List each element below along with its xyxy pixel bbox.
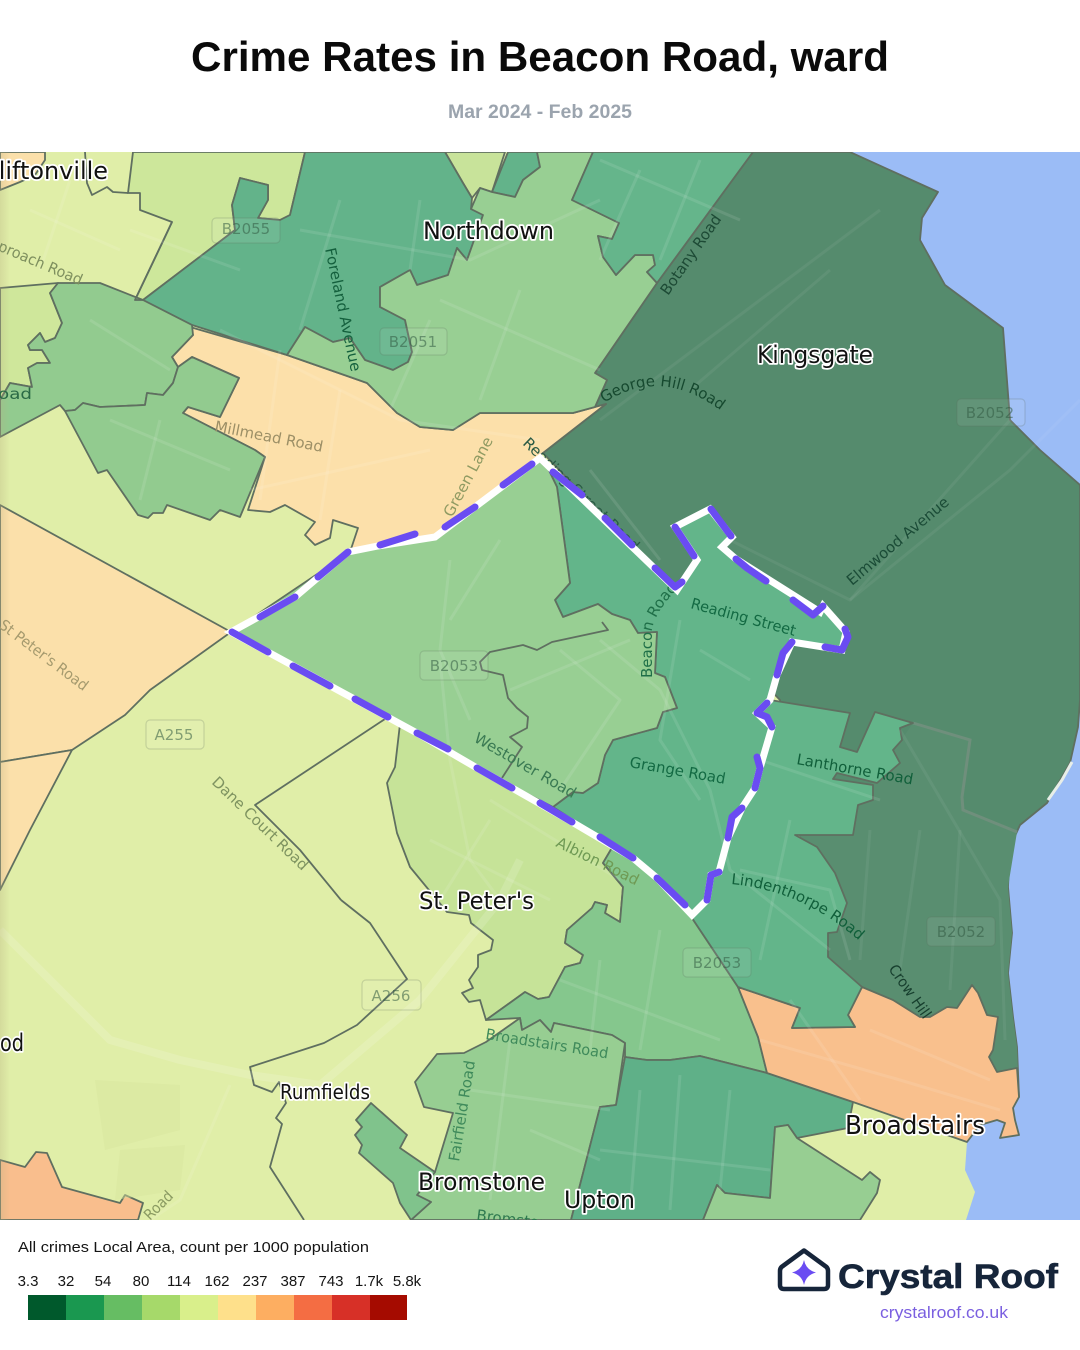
region: north yellow small (445, 152, 505, 198)
shield: B2055: B2055 (222, 220, 270, 238)
road path: Beacon Road baseline (652, 588, 678, 678)
road label: Albion Road: Albion Road (553, 833, 642, 889)
region: north-east medium green (572, 152, 753, 283)
coastal white fragment (1048, 762, 1072, 800)
legend scale numbers: 3.3 (18, 1273, 38, 1290)
road label: Elmwood Avenue: Elmwood Avenue (843, 493, 953, 589)
region: Cliftonville corner peach (0, 152, 45, 190)
shield: B2053 south (683, 948, 751, 977)
legend scale numbers: 743 (318, 1273, 344, 1290)
region: peach south-west strip (0, 750, 72, 890)
left edge fade (0, 152, 7, 1220)
place label: Rumfields: Rumfields (280, 1080, 370, 1104)
road label: Reading Street Road: Reading Street Road (519, 434, 643, 555)
boundary: southern district lines (250, 900, 407, 1220)
region: ward east medium green (543, 458, 913, 1028)
shield: B2051 (380, 328, 447, 355)
legend scale numbers: 5.8k (393, 1273, 422, 1290)
place label: Broadstairs: Broadstairs (845, 1111, 985, 1141)
title: Crime Rates in Beacon Road, ward (191, 33, 889, 80)
region: west strip yellow-green (0, 283, 62, 400)
website: crystalroof.co.uk (880, 1303, 1009, 1322)
region: bottom-left orange (0, 1152, 143, 1220)
region: west light green upper (0, 283, 193, 437)
road label: Westover Road: Westover Road (471, 729, 580, 802)
legend scale numbers: 32 (58, 1273, 74, 1290)
sea (850, 152, 1080, 1220)
icon: house with star (780, 1250, 828, 1289)
legend scale numbers: 1.7k (355, 1273, 384, 1290)
legend scale numbers: 237 (242, 1273, 268, 1290)
shield: B2053 west (420, 651, 488, 680)
road label: Grange Road: Grange Road (628, 753, 727, 788)
base area: low crime yellow-green (0, 152, 1080, 1220)
shield: A256: A256 (372, 987, 410, 1005)
region: Northdown light green (287, 152, 657, 430)
road path: George Hill Road baseline (604, 386, 720, 410)
place label: St. Peter's: St. Peter's (419, 887, 534, 915)
legend scale numbers: 54 (95, 1273, 111, 1290)
boundary: internal ward subdivision (480, 622, 608, 778)
legend scale numbers: 162 (204, 1273, 230, 1290)
shield: B2053 west: B2053 (430, 657, 478, 675)
place label: od fragment: od (0, 1029, 24, 1057)
shield: A255 (146, 720, 204, 749)
road label: Broadstairs Road: Broadstairs Road (484, 1025, 610, 1062)
green field shading: parks in the south-west (122, 1194, 132, 1199)
road shields (146, 218, 1025, 1010)
subtitle: date range: Mar 2024 - Feb 2025 (448, 102, 632, 123)
road label: Crow Hill: Crow Hill (885, 961, 935, 1022)
roads: pale street network (0, 160, 1080, 1220)
region: south-east light green (703, 1125, 880, 1220)
boundary: top-left yellow ward edge (135, 222, 172, 300)
region: Northdown medium green (143, 152, 483, 370)
place label: Upton: Upton (564, 1186, 635, 1214)
region: Upton medium green (571, 1056, 853, 1220)
region: St Peter's yellow-green (387, 724, 623, 1020)
region: west light green lower (65, 357, 265, 520)
region: ward light green west (231, 458, 677, 807)
road label: Green Lane: Green Lane (440, 434, 497, 520)
place label: Kingsgate: Kingsgate (757, 341, 873, 369)
legend scale numbers: 80 (133, 1273, 149, 1290)
ward outline: Beacon Road purple dashes (232, 464, 848, 905)
shield: B2052 north: B2052 (966, 404, 1014, 422)
road label: Fairfield Road: Fairfield Road (445, 1059, 479, 1163)
legend scale numbers: 387 (280, 1273, 306, 1290)
legend title: All crimes Local Area, count per 1000 population (18, 1239, 369, 1256)
boundary: north-west line (85, 152, 128, 195)
legend scale numbers: 114 (167, 1273, 191, 1290)
region: peach Millmead (172, 327, 606, 552)
brand name: Crystal Roof (838, 1258, 1059, 1296)
shield: B2055 (212, 218, 280, 243)
road label: Dane Court Road: Dane Court Road (208, 773, 312, 874)
shield: B2052 north (957, 399, 1025, 426)
logo: Crystal Roof (780, 1250, 1059, 1322)
road label: Bromstone Road fragment: Bromstone (476, 1206, 559, 1234)
region: Bromstone medium-light green (355, 1103, 435, 1220)
region: north small medium green (492, 152, 540, 197)
road label: Lanthorne Road: Lanthorne Road (795, 750, 915, 788)
region: Kingsgate dark green (543, 152, 1080, 1097)
road label: Millmead Road: Millmead Road (213, 417, 325, 456)
region: Fairfield light green (411, 1018, 625, 1220)
road label: George Hill Road: George Hill Road (600, 375, 726, 410)
road path: Lindenthorpe Road baseline (731, 884, 856, 938)
legend scale numbers (18, 1273, 422, 1290)
place label: Northdown: Northdown (423, 217, 554, 245)
boundary: south-west line (255, 717, 388, 900)
ward divide line in dark area (913, 723, 1017, 832)
shield: B2052 south (927, 917, 995, 946)
ward outline: Beacon Road white base (231, 458, 846, 915)
place label: Bromstone: Bromstone (418, 1168, 545, 1196)
region: lower east dark green (800, 832, 1018, 1068)
road label: Road fragment south: Road (140, 1187, 177, 1224)
road label: Beacon Road: Beacon Road (641, 586, 674, 676)
road label: Botany Road: Botany Road (657, 211, 725, 298)
region: northern yellow-green (128, 152, 305, 300)
road label: Reading Street: Reading Street (689, 594, 798, 640)
road label: Lindenthorpe Road: Lindenthorpe Road (732, 873, 866, 940)
region: peach west (0, 505, 231, 762)
shield: B2052 south: B2052 (937, 923, 985, 941)
shield: B2051: B2051 (389, 333, 437, 351)
legend colour bar (28, 1295, 407, 1320)
road label: Foreland Avenue: Foreland Avenue (321, 246, 365, 373)
shield: B2053 south: B2053 (693, 954, 741, 972)
region: Broadstairs orange (738, 985, 1019, 1142)
region: B2053 light green (486, 846, 767, 1073)
shield: A255: A255 (155, 726, 193, 744)
legend (18, 1239, 422, 1320)
shield: A256 (362, 980, 421, 1010)
